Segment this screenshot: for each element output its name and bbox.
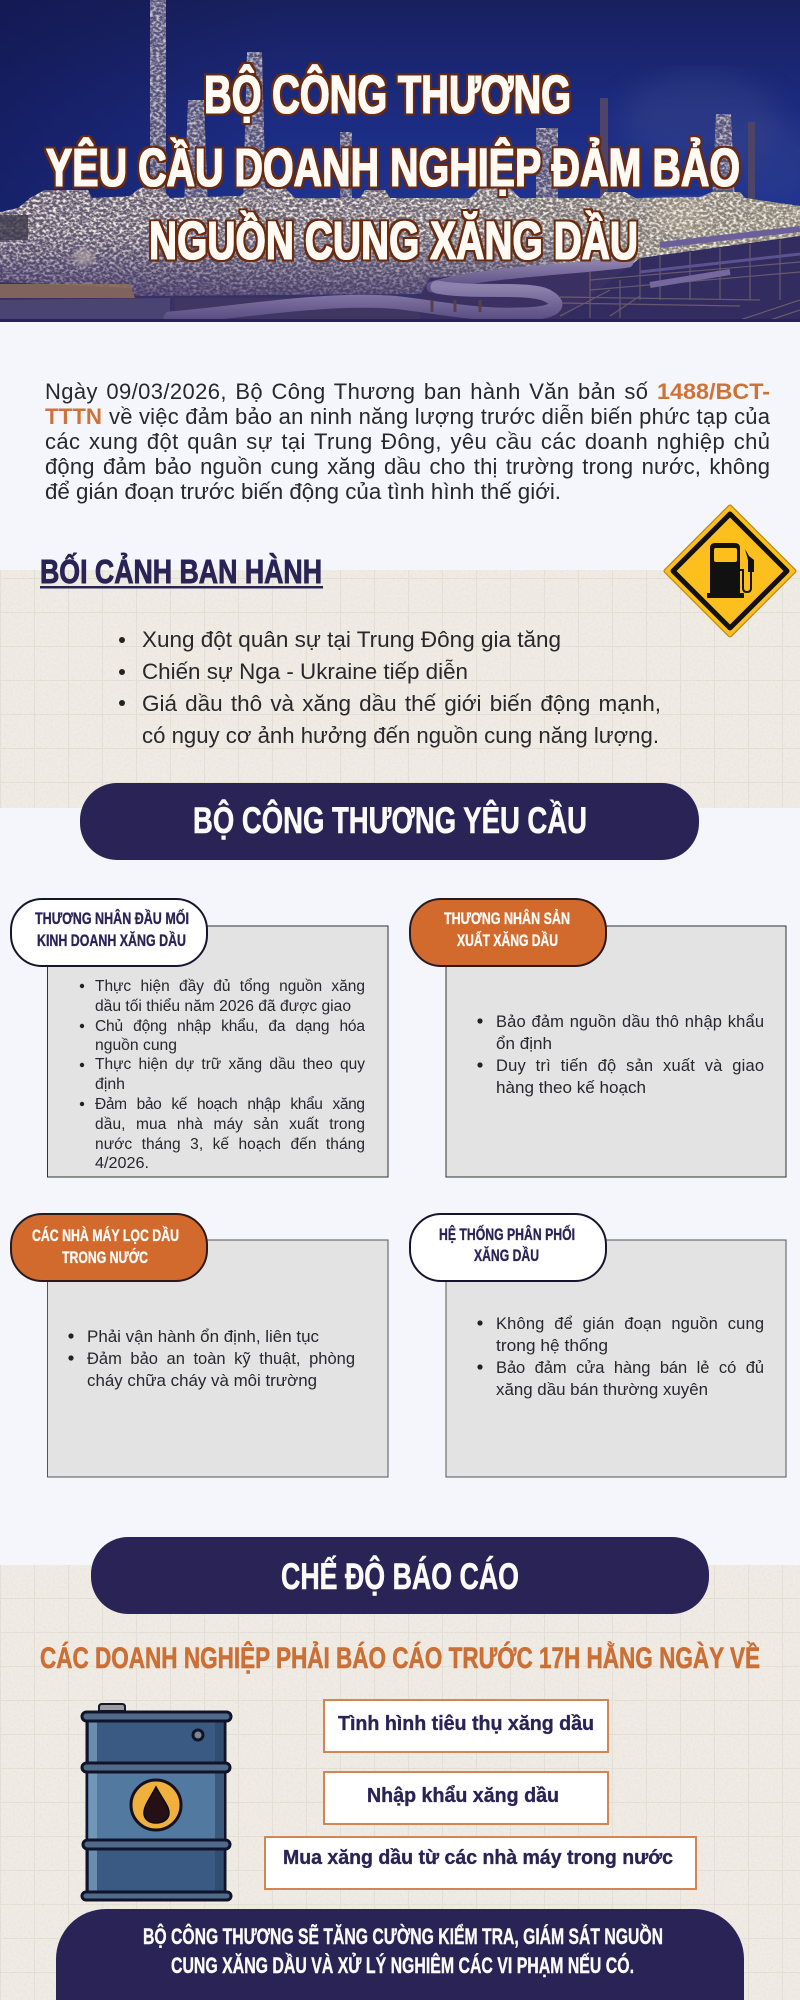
intro paragraph: TTTN — [45, 404, 102, 429]
context bullet list: Giá dầu thô và xăng dầu thế giới biến động mạnh, — [142, 691, 661, 716]
pipe rack — [560, 236, 800, 320]
title: BỘ CÔNG THƯƠNG — [204, 64, 571, 125]
heading pill: Bộ Công Thương yêu cầu — [80, 783, 699, 860]
card list: Đảm bảo kế hoạch nhập khẩu xăng — [95, 1096, 365, 1113]
card list: dầu, mua nhà máy sản xuất trong — [95, 1116, 365, 1133]
badge: KINH DOANH XĂNG DẦU — [37, 931, 186, 950]
card list: Không để gián đoạn nguồn cung — [496, 1315, 764, 1333]
card list: nước tháng 3, kế hoạch đến tháng — [95, 1136, 365, 1153]
panel: card domestic refineries — [11, 1214, 388, 1477]
card list: dầu tối thiểu năm 2026 đã được giao — [95, 998, 351, 1015]
card list: Duy trì tiến độ sản xuất và giao — [496, 1057, 764, 1075]
badge — [410, 899, 606, 966]
report box: imports: Nhập khẩu xăng dầu — [367, 1785, 559, 1807]
report box: consumption — [324, 1700, 608, 1752]
report box: domestic purchases: Mua xăng dầu từ các nhà máy trong nước — [283, 1847, 673, 1869]
panel: card distribution system — [410, 1214, 786, 1477]
intro paragraph — [45, 379, 771, 504]
badge: THƯƠNG NHÂN ĐẦU MỐI — [35, 908, 189, 928]
card list: hàng theo kế hoạch — [496, 1079, 646, 1097]
card list: Đảm bảo an toàn kỹ thuật, phòng — [87, 1350, 355, 1368]
badge — [410, 1214, 606, 1281]
context bullet list — [119, 627, 661, 748]
ground — [0, 268, 628, 319]
card list: trong hệ thống — [496, 1337, 608, 1355]
badge: HỆ THỐNG PHÂN PHỐI — [439, 1224, 575, 1244]
panel: card producers — [410, 899, 786, 1177]
towers — [150, 0, 755, 210]
card list: nguồn cung — [95, 1037, 177, 1054]
intro paragraph: động đảm bảo nguồn cung xăng dầu cho thị trường trong nước, không — [45, 454, 770, 479]
badge: XUẤT XĂNG DẦU — [457, 931, 558, 950]
card list: Chủ động nhập khẩu, đa dạng hóa — [95, 1018, 365, 1035]
intro paragraph: Ngày 09/03/2026, Bộ Công Thương ban hành Văn bản số — [45, 379, 648, 404]
report box: imports — [324, 1772, 608, 1824]
card list — [477, 1013, 764, 1097]
card list: cháy chữa cháy và môi trường — [87, 1372, 317, 1390]
pipes — [432, 262, 628, 287]
badge: TRONG NƯỚC — [62, 1248, 148, 1267]
card list: 4/2026. — [95, 1155, 149, 1172]
context bullet list: Xung đột quân sự tại Trung Đông gia tăng — [142, 627, 561, 652]
card list — [80, 978, 365, 1172]
card list: Thực hiện đầy đủ tổng nguồn xăng — [95, 978, 365, 995]
panel: reporting paper background — [0, 1565, 800, 2000]
heading pill: Chế độ báo cáo — [91, 1537, 709, 1614]
intro paragraph: 1488/BCT- — [657, 379, 770, 404]
panel: card wholesale traders — [11, 899, 388, 1177]
badge: XĂNG DẦU — [474, 1246, 539, 1265]
intro paragraph: các xung đột quân sự tại Trung Đông, yêu cầu các doanh nghiệp chủ — [45, 429, 770, 454]
report box: domestic purchases — [265, 1837, 696, 1889]
badge — [11, 1214, 207, 1281]
intro paragraph: để gián đoạn trước biến động của tình hình thế giới. — [45, 479, 561, 504]
card list: Bảo đảm nguồn dầu thô nhập khẩu — [496, 1013, 764, 1031]
heading pill: Bộ Công Thương yêu cầu: BỘ CÔNG THƯƠNG YÊU CẦU — [193, 799, 587, 841]
context bullet list: Chiến sự Nga - Ukraine tiếp diễn — [142, 659, 468, 684]
panel: header banner with refinery photo — [0, 0, 800, 320]
card list: ổn định — [496, 1035, 552, 1053]
bottom callout: CUNG XĂNG DẦU VÀ XỬ LÝ NGHIÊM CÁC VI PHẠM NẾU CÓ. — [171, 1953, 634, 1978]
icon: fuel pump warning sign — [666, 507, 794, 635]
panel: context paper background — [0, 570, 800, 808]
card list — [68, 1328, 355, 1390]
refinery band — [0, 186, 800, 296]
heading pill: Chế độ báo cáo: CHẾ ĐỘ BÁO CÁO — [281, 1555, 519, 1597]
badge — [11, 899, 207, 966]
title — [46, 64, 740, 271]
bottom callout — [56, 1909, 744, 2000]
intro paragraph: về việc đảm bảo an ninh năng lượng trước diễn biến phức tạp của — [109, 404, 771, 429]
icon: oil barrel — [82, 1704, 231, 1900]
context bullet list: có nguy cơ ảnh hưởng đến nguồn cung năng lượng. — [142, 723, 659, 748]
card list: Phải vận hành ổn định, liên tục — [87, 1328, 319, 1346]
badge: THƯƠNG NHÂN SẢN — [444, 909, 570, 928]
card list: định — [95, 1076, 125, 1093]
badge: CÁC NHÀ MÁY LỌC DẦU — [32, 1226, 179, 1245]
card list: Bảo đảm cửa hàng bán lẻ có đủ — [496, 1359, 764, 1377]
card list: xăng dầu bán thường xuyên — [496, 1381, 708, 1399]
card list — [477, 1315, 764, 1399]
heading: context: BỐI CẢNH BAN HÀNH — [40, 552, 322, 590]
report box: consumption: Tình hình tiêu thụ xăng dầu — [338, 1713, 594, 1735]
card list: Thực hiện dự trữ xăng dầu theo quy — [95, 1056, 365, 1073]
